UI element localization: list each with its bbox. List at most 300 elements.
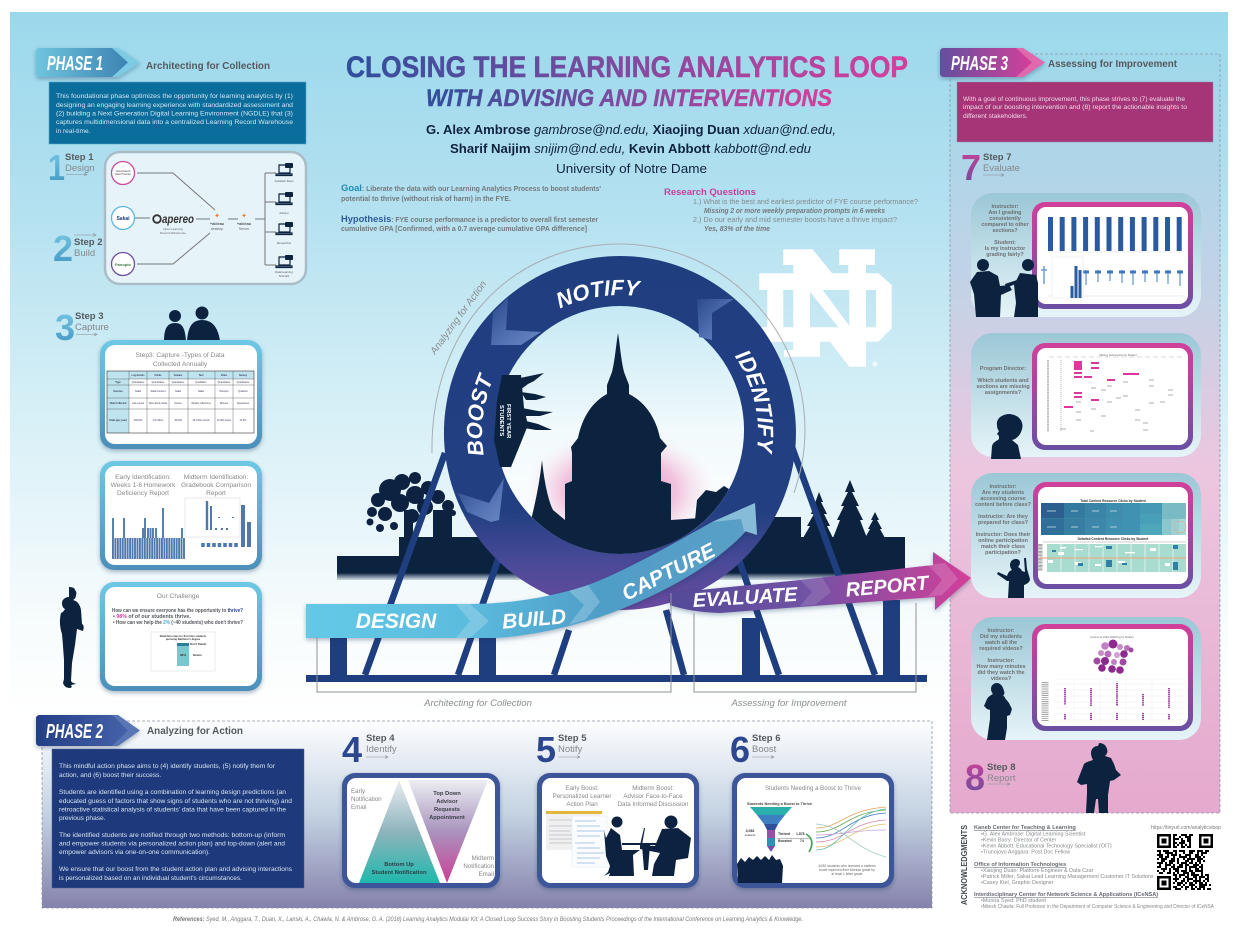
- skyline silhouette: [337, 510, 905, 580]
- source nodes: Panopto: [115, 262, 132, 267]
- step 6: 6: [730, 729, 750, 770]
- qr code: [1151, 825, 1221, 890]
- authors: Sharif Naijim snijim@nd.edu, Kevin Abbott kabbott@nd.edu: [450, 141, 812, 156]
- step 2: Step 2: [74, 237, 103, 248]
- step 7: Step 7: [983, 152, 1012, 163]
- panel: phase 2 backdrop: [42, 721, 932, 908]
- acknowledgments: •Kevin Barry: Director of Center: [981, 838, 1056, 844]
- phase 2 description box: Students are identified using a combination of learning design predictions (an: [59, 789, 286, 796]
- phase 1 description box: [49, 82, 306, 144]
- panel: course content access: participation?: [985, 550, 1021, 556]
- panel: identify triangles: Student Notification: [371, 870, 427, 876]
- phase 1 heading: Architecting for Collection: [146, 60, 270, 72]
- acknowledgments: •Munira Syed: PhD student: [981, 898, 1046, 904]
- data types table: Sakai: [198, 390, 204, 393]
- chart: missing assignments heat table: [1048, 353, 1183, 432]
- step 6: Step 6: [752, 733, 781, 744]
- chart: bubble chart of video watching: [1045, 635, 1183, 722]
- panel: video watching: Did my students: [980, 634, 1022, 640]
- phase 1 description box: This foundational phase optimizes the opportunity for learning analytics by (1): [56, 93, 293, 100]
- panel: course content access: Are my students: [982, 490, 1024, 496]
- panel: identify triangles: Requests: [434, 807, 460, 813]
- data types table: Responses: [237, 402, 250, 405]
- tableau logos: +ableau: [237, 222, 252, 226]
- tableau logos: +ableau: [210, 222, 225, 226]
- card: [1032, 343, 1193, 450]
- ring: [444, 256, 796, 610]
- step 4: Identify: [366, 744, 397, 755]
- panel: identify triangles: [342, 773, 500, 888]
- icon: standing student silhouette: [60, 587, 84, 688]
- panel: boost: [732, 773, 894, 888]
- panel: course content access: [971, 473, 1201, 598]
- panel: course content access: Instructor: Does their: [976, 532, 1031, 538]
- step 2: Build: [74, 248, 95, 259]
- funnel chart: 1,878: [796, 832, 805, 836]
- icon: advisor and student at desk: [604, 816, 691, 876]
- panel: identify triangles: Top Down: [433, 791, 461, 797]
- step 6: [730, 729, 781, 770]
- apereo logo: apereo: [162, 212, 194, 226]
- apereo logo: Record Warehouse: [160, 231, 186, 235]
- step 4: 4: [342, 729, 362, 770]
- card: [1032, 202, 1193, 309]
- ribbon: evaluate and report: REPORT: [845, 572, 931, 602]
- data types table: Quantitative: [218, 381, 231, 384]
- title: CLOSING THE LEARNING ANALYTICS LOOP: [346, 51, 908, 84]
- banner: first year students: FIRST YEAR: [505, 404, 511, 439]
- title: WITH ADVISING AND INTERVENTIONS: [426, 85, 832, 112]
- step 5: Step 5: [558, 733, 587, 744]
- data types table: Scale (per year): [109, 419, 127, 422]
- icon: trees beside dome: [695, 486, 729, 525]
- references: References: Syed, M., Anggara, T., Duan, X., Lanski, A., Chawla, N. & Ambrose, G. A. (2018) Learning Analytics Modular Kit: A Closed Loop Success Story in Boosting Students Proceedings of the International Conference on Learning Analytics & Knowledge.: [173, 917, 803, 923]
- authors: University of Notre Dame: [556, 161, 707, 176]
- step 8: [965, 757, 1016, 798]
- panel: video watching: Instructor:: [988, 628, 1015, 634]
- panel: identify triangles: Early: [351, 788, 366, 795]
- panel: types of data collected: Step3: Capture -Types of Data: [135, 352, 225, 359]
- bracket: assessing for improvement: [694, 603, 916, 709]
- data types table: 15 million words: [192, 419, 210, 422]
- data types table: Web article clicks: [149, 402, 168, 405]
- ribbon: evaluate and report: EVALUATE: [692, 584, 799, 612]
- icon: two people talking: [970, 259, 1038, 317]
- panel: identify triangles: Email: [479, 871, 494, 878]
- phase 3 description box: impact of our boosting intervention and (8) report the actionable insights to: [963, 104, 1187, 111]
- phase 1 description box: in real-time.: [56, 128, 91, 135]
- icon: woman holding tablet: [984, 683, 1012, 740]
- panel: grading consistency: Is my instructor: [985, 246, 1026, 252]
- data types table: 2.5 million: [153, 419, 164, 422]
- data types table: Grades: [174, 374, 183, 377]
- chart: retention: Don't Retain: [190, 642, 207, 646]
- panel: identification reports: Deficiency Report: [117, 490, 169, 497]
- data types table: Qualtrics: [238, 390, 249, 393]
- arc: analyzing for action: Analyzing for Action: [428, 279, 489, 358]
- panel: grading consistency: grading fairly?: [986, 252, 1024, 258]
- chart: retention: Retain: [193, 653, 202, 657]
- arc: analyzing for action: [428, 244, 805, 493]
- panel: grading consistency: consistently: [989, 216, 1021, 222]
- panel: grading consistency: Am I grading: [989, 210, 1021, 216]
- phase 3 tag: PHASE 3: [951, 53, 1008, 75]
- authors: [426, 122, 836, 176]
- step 3: 3: [55, 307, 75, 348]
- data types table: 41.5%: [240, 419, 247, 422]
- acknowledgments: •G. Alex Ambrose: Digital Learning Scientist: [981, 832, 1086, 838]
- panel: identify triangles: Notification: [463, 863, 495, 870]
- title: [346, 51, 908, 112]
- step 2: 2: [53, 228, 73, 269]
- panel: our challenge: How can we ensure everyone has the opportunity to thrive?: [112, 608, 243, 614]
- acknowledgments: [960, 824, 1214, 910]
- panel: notify: Data Informed Discussion: [618, 801, 689, 808]
- phase 1 tag: PHASE 1: [47, 53, 103, 75]
- funnel chart: Thrived: [778, 832, 790, 836]
- panel: video watching: How many minutes: [976, 664, 1026, 670]
- phase 3 description box: [957, 82, 1213, 142]
- panel: types of data collected: [100, 340, 262, 449]
- panel: course content access: content before class?: [975, 502, 1031, 508]
- acknowledgments: ACKNOWLEDGMENTS: [960, 824, 969, 905]
- funnel chart: Students Needing a Boost to Thrive: [747, 801, 813, 806]
- phase 3 description box: With a goal of continuous improvement, this phase strives to (7) evaluate the: [963, 96, 1185, 103]
- icon: ND logo: [759, 249, 892, 367]
- phase 2 description box: is personalized based on an individual student's circumstances.: [59, 875, 242, 882]
- laptop users: [275, 163, 294, 278]
- slope chart: [816, 807, 886, 857]
- bridge supports: [306, 447, 927, 682]
- panel: identify triangles: Advisor: [436, 799, 459, 805]
- panel: course content access: accessing course: [980, 496, 1026, 502]
- funnel chart: students: [745, 833, 756, 837]
- bracket: architecting for collection: Architecting for Collection: [423, 698, 532, 709]
- phase 1 description box: (2) building a Next Generation Digital Learning Environment (NGDLE) that (3): [56, 110, 293, 118]
- laptop users: Scientist: [279, 274, 290, 278]
- research questions: 1.) What is the best and earliest predictor of FYE course performance?: [693, 198, 918, 206]
- panel: grading consistency: compared to other: [981, 222, 1030, 228]
- phase 1 tag: [36, 48, 140, 77]
- chart: treemap of resource clicks: Total Content Resource Clicks by Student: [1080, 499, 1147, 503]
- icon: businessman silhouette: [1077, 743, 1121, 813]
- phase 2 heading: Analyzing for Action: [147, 725, 243, 737]
- goal and hypothesis: [341, 183, 601, 233]
- acknowledgments: Kaneb Center for Teaching & Learning: [974, 825, 1076, 831]
- documents: [546, 811, 607, 867]
- research questions: [664, 187, 918, 233]
- icon: two people looking at panel: [164, 306, 220, 341]
- chart: grade box plots: [1041, 234, 1184, 298]
- triangle: top down: [408, 780, 488, 883]
- step 4: [342, 729, 397, 770]
- data types table: Video: [221, 374, 228, 377]
- panel: boost: boost improved their Moreau grade by: [819, 868, 875, 872]
- tableau logos: ✦: [241, 212, 247, 220]
- tableau logos: ✦: [214, 212, 220, 220]
- phase 2 description box: previous phase.: [59, 815, 106, 822]
- panel: course content access: match their class: [981, 544, 1025, 550]
- panel: boost: 44/52 students who received a midterm: [818, 864, 876, 868]
- icon: dome silhouette: [532, 333, 708, 554]
- panel: grading consistency: Student:: [994, 240, 1016, 246]
- panel: our challenge: • 98% of of our students thrive.: [113, 614, 191, 620]
- step 6: Boost: [752, 744, 777, 755]
- ring label: boost: BOOST: [466, 372, 491, 455]
- bar chart: homework deficiency: [112, 508, 185, 548]
- step 8: Step 8: [987, 762, 1016, 773]
- ring label: identify: IDENTIFY: [734, 350, 774, 455]
- panel: phase 3 backdrop: [950, 54, 1220, 813]
- panel: identify triangles: Appointment: [429, 815, 465, 821]
- ring label: notify: NOTIFY: [557, 280, 642, 308]
- data types table: 15,000: [174, 419, 182, 422]
- panel: identify triangles: Email: [351, 804, 366, 811]
- research questions: Missing 2 or more weekly preparation prompts in 6 weeks: [704, 208, 885, 215]
- bracket: assessing for improvement: Assessing for Improvement: [730, 698, 847, 709]
- triangle: bottom up: [359, 780, 440, 883]
- data types table: Clicks: [154, 374, 162, 377]
- data types table: Sources: [113, 390, 123, 393]
- acknowledgments: Interdisciplinary Center for Network Science & Applications (ICeNSA): [974, 892, 1158, 898]
- phase 2 description box: We ensure that our boost from the student action plan and advising interactions: [59, 866, 293, 873]
- icon: presenter silhouette: [997, 558, 1030, 598]
- goal and hypothesis: Goal: Liberate the data with our Learning Analytics Process to boost students': [341, 183, 601, 194]
- data types table: Qualitative: [195, 381, 207, 384]
- phase 3 tag: [940, 48, 1045, 77]
- chart: treemap of resource clicks: [1041, 499, 1186, 535]
- panel: identify triangles: Notification: [351, 796, 382, 803]
- qr code: https://tinyurl.com/analyticsloop: [1151, 825, 1221, 831]
- panel: video watching: did they watch the: [977, 670, 1025, 676]
- panel: video watching: required videos?: [979, 646, 1023, 652]
- step 5: [536, 729, 587, 770]
- panel: grading consistency: Instructor:: [992, 204, 1019, 210]
- phase 2 description box: empower advisors via one-on-one communication).: [59, 849, 210, 856]
- panel: course content access: Instructor:: [990, 484, 1017, 490]
- ribbon: design, build, capture: DESIGN: [356, 610, 437, 633]
- chart: retention: pursuing Bachelor's degree: [166, 637, 201, 641]
- tableau logos: desktop: [211, 227, 223, 231]
- funnel chart: [745, 801, 813, 852]
- data types table: Weekly reflections: [191, 402, 211, 405]
- step 3: Capture: [75, 322, 109, 333]
- data types table: [107, 371, 254, 433]
- panel: identification reports: [100, 461, 262, 570]
- acknowledgments: •Patrick Miller, Sakai Lead Learning Management Customer IT Solutions: [981, 874, 1154, 880]
- panel: notify: Personalized Learner: [553, 793, 611, 800]
- panel: identification reports: Early Identification:: [115, 474, 171, 481]
- phase 2 description box: [52, 749, 304, 888]
- data types table: Quantitative: [152, 381, 165, 384]
- laptop users: Advisor: [279, 211, 289, 215]
- panel: video watching: watch all the: [984, 640, 1017, 646]
- goal and hypothesis: potential to thrive (without risk of harm) in the FYE.: [341, 196, 511, 203]
- data types table: Quantitative: [132, 381, 145, 384]
- step 7: 7: [961, 147, 981, 188]
- bracket: architecting for collection: [317, 593, 671, 709]
- phase 2 tag: [36, 715, 140, 746]
- phase 2 description box: retroactive statistical analysis of students' data that have been captured in the: [59, 806, 286, 814]
- funnel chart: 3,083: [746, 829, 754, 833]
- data types table: Link events: [132, 402, 145, 405]
- step 1: 1: [48, 147, 65, 188]
- step 7: [961, 147, 1020, 188]
- chart: detailed resource clicks: [1040, 537, 1186, 572]
- laptop users: Researcher: [277, 241, 291, 245]
- acknowledgments: •Xiaojing Duan: Platform Engineer & Data Czar: [981, 868, 1094, 874]
- data types table: Quantitative: [237, 381, 250, 384]
- step 2: [53, 228, 103, 269]
- data types table: 100,000: [134, 419, 143, 422]
- source nodes: [112, 162, 134, 276]
- apereo logo: Open Learning: [163, 227, 183, 231]
- step 5: 5: [536, 729, 556, 770]
- step 4: Step 4: [366, 733, 395, 744]
- card: [1033, 482, 1193, 589]
- phase 3 heading: Assessing for Improvement: [1048, 58, 1177, 70]
- goal and hypothesis: Hypothesis: FYE course performance is a predictor to overall first semester: [341, 214, 598, 225]
- panel: boost: Students Needing a Boost to Thrive: [765, 785, 862, 792]
- ribbon: design, build, capture: BUILD: [501, 605, 567, 634]
- panel: our challenge: [100, 582, 262, 691]
- chart: retention: Retention rates for first-time students: [160, 634, 207, 638]
- panel: missing assignments: sections are missing: [976, 384, 1030, 390]
- panel: course content access: prepared for class?: [978, 520, 1028, 526]
- panel: notify: Advisor Face-to-Face: [623, 793, 683, 800]
- panel: video watching: Instructor:: [988, 658, 1015, 664]
- step 7: Evaluate: [983, 163, 1020, 174]
- panel: video watching: [971, 617, 1201, 740]
- icon: pine trees: [803, 480, 885, 538]
- panel: grading consistency: [970, 193, 1201, 317]
- phase 2 description box: educated guess of factors that show signs of students who are not thriving) and: [59, 798, 292, 805]
- research questions: Yes, 83% of the time: [704, 226, 770, 233]
- chart: detailed resource clicks: Detailed Content Resource Clicks by Student: [1078, 537, 1149, 541]
- data types table: Sakai: [135, 390, 141, 393]
- source nodes: Data Provider: [115, 172, 131, 176]
- data types table: Quantitative: [172, 381, 185, 384]
- data types table: Minutes: [220, 402, 229, 405]
- acknowledgments: Office of Information Technologies: [974, 862, 1066, 868]
- panel: missing assignments: Which students and: [977, 378, 1029, 384]
- panel: notify: Midterm Boost:: [632, 785, 674, 792]
- panel: types of data collected: Collected Annually: [153, 361, 208, 368]
- step 1: Design: [65, 163, 95, 174]
- panel: identification reports: Midterm Identification:: [184, 474, 248, 481]
- panel: boost: at least 1 letter grade: [832, 872, 863, 876]
- data types table: Text: [199, 374, 204, 377]
- source nodes: Cloud-based: [116, 169, 131, 173]
- data types table: Sakai: [175, 390, 181, 393]
- icon: thinking person: [991, 414, 1022, 459]
- phase 1 description box: designing an engaging learning experience with standardized assessment and: [56, 102, 293, 109]
- bar chart: gradebook comparison: [185, 498, 249, 547]
- card: [1032, 624, 1193, 731]
- acknowledgments: •Nitesh Chawla: Full Professor in the Department of Computer Science & Engineering and Director of ICeNSA: [981, 904, 1214, 910]
- step 5: Notify: [558, 744, 583, 755]
- ribbon: design, build, capture: [306, 503, 757, 638]
- panel: course content access: online participation: [978, 538, 1028, 544]
- chart: retention: [151, 632, 215, 671]
- ring chevrons: [458, 298, 734, 522]
- source nodes: Sakai: [116, 216, 130, 222]
- phase 2 description box: The identified students are notified through two methods: bottom-up (inform: [59, 832, 286, 839]
- phase 2 tag: PHASE 2: [46, 721, 103, 743]
- data types table: 22,000 views: [217, 419, 232, 422]
- panel: missing assignments: [971, 333, 1201, 459]
- chart: missing assignments heat table: Missing Submissions by Student: [1099, 353, 1137, 357]
- ribbon: evaluate and report: [670, 552, 971, 613]
- phase 3 description box: different stakeholders.: [963, 113, 1028, 120]
- ribbon: design, build, capture: CAPTURE: [618, 539, 720, 606]
- panel: grading consistency: sections?: [992, 228, 1018, 234]
- data types table: Scores: [174, 402, 183, 405]
- panel: notify: Early Boost:: [565, 785, 599, 792]
- step 1: Step 1: [65, 152, 94, 163]
- research questions: Research Questions: [664, 187, 756, 198]
- data types table: Sakai Content: [150, 390, 166, 393]
- panel: identify triangles: Midterm: [472, 855, 494, 862]
- panel: missing assignments: assignments?: [985, 390, 1021, 396]
- banner: first year students: [494, 373, 553, 467]
- icon: tree silhouette: [366, 472, 456, 540]
- authors: G. Alex Ambrose gambrose@nd.edu, Xiaojing Duan xduan@nd.edu,: [426, 122, 836, 137]
- banner: first year students: STUDENTS: [498, 405, 504, 436]
- chart: retention: 98%: [180, 653, 186, 657]
- data types table: Data Collected: [110, 402, 127, 405]
- icon: crowd silhouette: [737, 855, 783, 883]
- data types table: Type: [115, 381, 121, 384]
- panel: identify triangles: Bottom Up: [384, 862, 414, 868]
- step 8: Report: [987, 773, 1016, 784]
- data types table: Survey: [239, 374, 248, 377]
- acknowledgments: •Kevin Abbott: Educational Technology Specialist (OIT): [981, 844, 1112, 850]
- step 3: Step 3: [75, 311, 104, 322]
- research questions: 2.) Do our early and mid semester boosts have a thrive impact?: [693, 216, 897, 224]
- data types table: Log Events: [132, 374, 145, 377]
- panel: course content access: Instructor: Are they: [978, 514, 1028, 520]
- panel: identification reports: Weeks 1-6 Homework: [111, 482, 176, 489]
- panel: identification reports: Gradebook Comparison: [181, 482, 251, 489]
- panel: identification reports: Report: [206, 490, 226, 497]
- panel: video watching: videos?: [991, 676, 1011, 682]
- panel: notify: [537, 773, 699, 888]
- phase 2 description box: This mindful action phase aims to (4) identify students, (5) notify them for: [59, 763, 276, 770]
- panel: missing assignments: Program Director:: [980, 366, 1026, 372]
- funnel chart: 74: [800, 839, 804, 843]
- chart: bubble chart of video watching: Amount of Video Watching by Student: [1090, 635, 1134, 639]
- acknowledgments: •Trunojoyo Anggara: Post Doc Fellow: [981, 850, 1070, 856]
- phase 2 description box: and empower students via personalized action plan) and top-down (alert and: [59, 840, 285, 848]
- apereo logo: [153, 212, 194, 235]
- laptop users: Data/Learning: [275, 270, 293, 274]
- architecture connectors: [133, 173, 276, 265]
- panel: our challenge: Our Challenge: [157, 593, 200, 600]
- panel: notify: Action Plan: [566, 801, 598, 808]
- capitol dome scene: [502, 333, 744, 554]
- funnel chart: Boosted: [778, 839, 792, 843]
- laptop users: Assistant Dean: [275, 179, 294, 183]
- panel: data architecture diagram: [105, 152, 306, 284]
- tableau logos: Server: [239, 227, 250, 231]
- tableau logos: [210, 212, 252, 231]
- data types table: Panopto: [220, 390, 229, 393]
- step 8: 8: [965, 757, 985, 798]
- phase 1 description box: captures multidimensional data into a centralized Learning Record Warehouse: [56, 119, 293, 126]
- goal and hypothesis: cumulative GPA [Confirmed, with a 0.7 average cumulative GPA difference]: [341, 226, 587, 233]
- acknowledgments: •Casey Kiel, Graphic Designer: [981, 880, 1054, 886]
